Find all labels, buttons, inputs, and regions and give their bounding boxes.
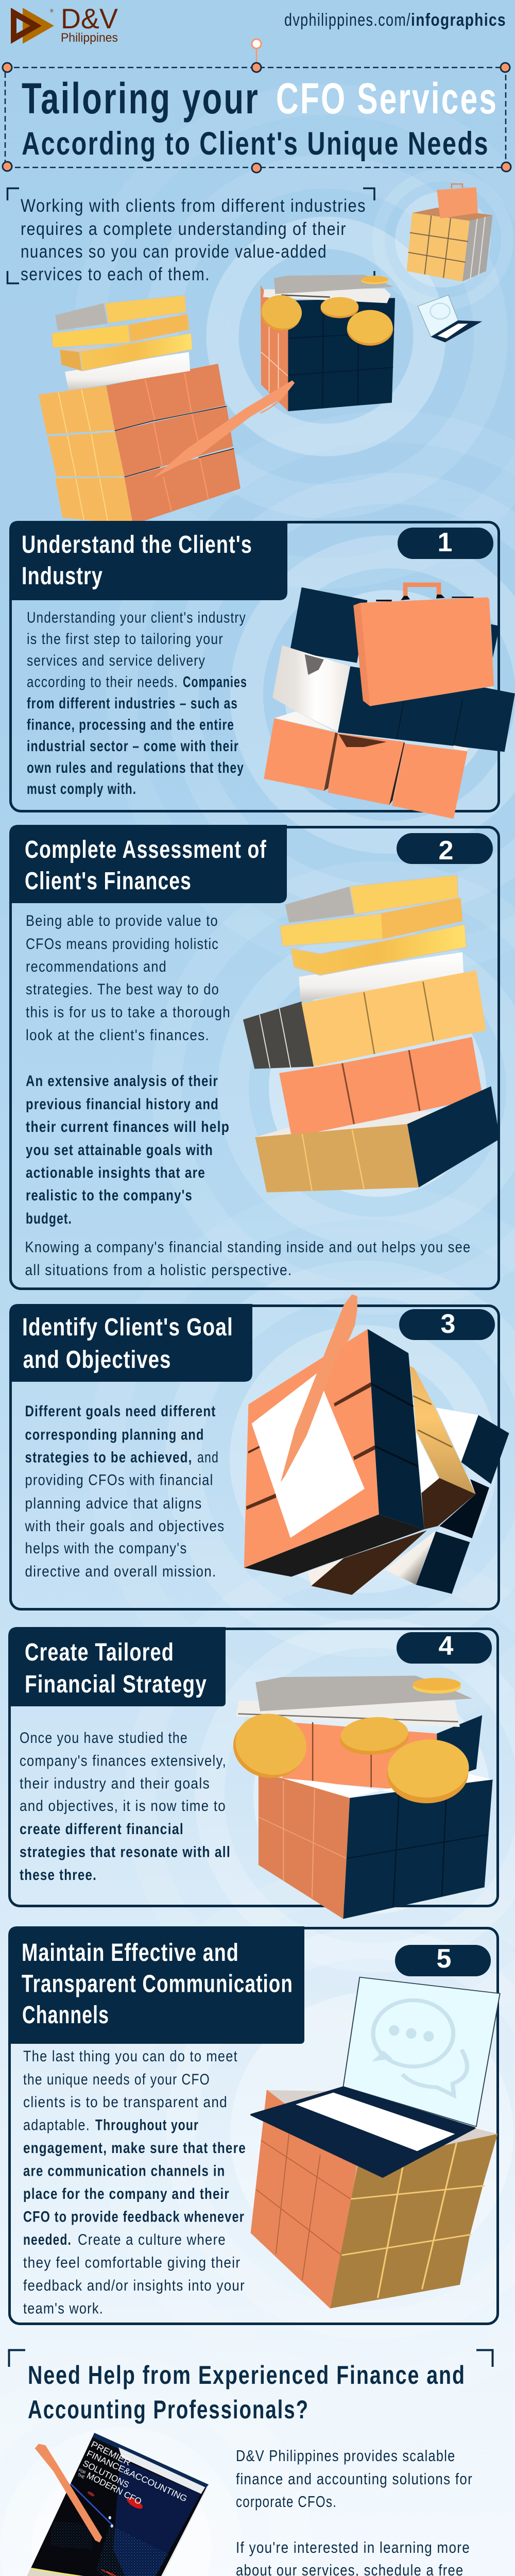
panel 5 heading: Maintain Effective and [22, 1939, 239, 1967]
step number 4: 4 [439, 1631, 454, 1661]
panel 1 body text: must comply with. [27, 781, 136, 798]
panel 1 body text: services and service delivery [27, 652, 205, 669]
panel 2 body text [25, 912, 471, 1279]
call to action body text: finance and accounting solutions for [236, 2470, 473, 2488]
panel 2 body text: An extensive analysis of their [26, 1073, 218, 1090]
panel 3 body text: planning advice that aligns [25, 1495, 202, 1512]
panel 4 body text: strategies that resonate with all [20, 1844, 231, 1861]
panel 5 body text: engagement, make sure that there [23, 2140, 246, 2157]
panel 1 heading: Industry [22, 563, 103, 590]
intro text with brackets: services to each of them. [21, 264, 210, 284]
panel 3 body text: strategies to be achieved, [25, 1449, 193, 1466]
panel 4 body text: company's finances extensively, [20, 1753, 227, 1770]
panel 1 body text: from different industries – such as [27, 695, 238, 712]
logo: Philippines [61, 31, 118, 45]
panel 2 body text: this is for us to take a thorough [26, 1004, 231, 1021]
intro text with brackets [7, 189, 374, 284]
panel 5 heading: Channels [22, 2002, 109, 2029]
panel 2 heading: Complete Assessment of [25, 836, 267, 863]
panel 2 body text: realistic to the company's [26, 1187, 193, 1204]
step number 2 [397, 833, 493, 866]
call to action body text: corporate CFOs. [236, 2493, 337, 2511]
call to action heading: Accounting Professionals? [28, 2395, 309, 2424]
panel 5 body text: place for the company and their [23, 2185, 230, 2202]
panel 3 body text: and [197, 1449, 219, 1466]
call to action body text: If you're interested in learning more [236, 2538, 470, 2556]
panel 2 body text: their current finances will help [26, 1118, 230, 1136]
panel 5 body text: clients is to be transparent and [23, 2094, 228, 2111]
illustration: lower cube rows [255, 1037, 500, 1192]
illustration: whitepaper on cube with pen [17, 2433, 209, 2576]
panel 4 body text [20, 1730, 231, 1884]
panel 1: understand the client's industry [9, 521, 515, 819]
panel 2 body text: actionable insights that are [26, 1164, 205, 1181]
panel 3 body text: with their goals and objectives [25, 1518, 225, 1535]
illustration: pen [153, 380, 295, 478]
panel 5 body text: CFO to provide feedback whenever [23, 2208, 245, 2226]
panel 5 body text: are communication channels in [23, 2163, 226, 2179]
panel 5 body text: The last thing you can do to meet [23, 2048, 238, 2065]
illustration: whitepaper on cube with pen: FOR [78, 2468, 87, 2475]
panel 2 heading [9, 825, 287, 903]
panel 1 body text: own rules and regulations that they [27, 759, 244, 776]
panel 2 body text: CFOs means providing holistic [26, 936, 219, 953]
panel 1 body text: finance, processing and the entire [27, 716, 234, 734]
panel 4 heading: Create Tailored [25, 1639, 174, 1666]
panel 4 heading: Financial Strategy [25, 1671, 207, 1698]
illustration: dark cube with sheets and coins [257, 275, 395, 411]
logo [11, 3, 118, 45]
panel 5 body text: the unique needs of your CFO [23, 2071, 210, 2088]
panel 4: create tailored financial strategy [8, 1627, 497, 1919]
panel 5 body text: Throughout your [95, 2117, 199, 2134]
panel 1 body text: according to their needs. [27, 674, 178, 690]
step number 1: 1 [438, 528, 452, 557]
panel 4 body text: and objectives, it is now time to [20, 1798, 226, 1815]
panel 5 body text: Create a culture where [78, 2231, 226, 2248]
site url: dvphilippines.com/ [284, 10, 411, 30]
illustration: small laptop [418, 295, 482, 343]
panel 1 heading [9, 521, 287, 600]
step number 3 [399, 1309, 495, 1340]
logo: ® [50, 8, 54, 13]
panel 5 heading: Transparent Communication [22, 1970, 293, 1998]
panel 5: maintain effective and transparent communication channels [8, 1926, 500, 2324]
logo: D&V [61, 3, 118, 35]
panel 3 heading [9, 1304, 252, 1382]
step number 5 [395, 1944, 491, 1976]
panel 1 body text: Companies [183, 674, 247, 690]
call to action body text [236, 2447, 480, 2576]
panel 1 body text: is the first step to tailoring your [27, 631, 224, 648]
panel 5 body text [23, 2048, 246, 2317]
step number 2: 2 [439, 836, 453, 866]
title selection frame [3, 39, 511, 173]
panel 4 body text: create different financial [20, 1821, 184, 1838]
panel 5 heading [8, 1926, 304, 2044]
panel 1 body text [27, 609, 247, 798]
step number 4 [397, 1631, 492, 1664]
panel 4 body text: Once you have studied the [20, 1730, 188, 1747]
intro text with brackets: Working with clients from different industries [21, 196, 366, 216]
panel 3: identify client's goal and objectives [9, 1294, 509, 1609]
panel 4 heading [8, 1627, 226, 1706]
illustration: books on multicolour cube [243, 875, 486, 1069]
panel 2 body text: recommendations and [26, 958, 167, 975]
panel 4 body text: their industry and their goals [20, 1775, 210, 1792]
panel 5 body text: feedback and/or insights into your [23, 2277, 245, 2294]
illustration: whitepaper on cube with pen: MODERN CFO [85, 2470, 143, 2506]
illustration: orange and yellow cube with books [39, 295, 241, 524]
panel 3 heading: Identify Client's Goal [22, 1314, 233, 1341]
panel 2 body text: budget. [26, 1210, 72, 1227]
panel 2 body text: all situations from a holistic perspective. [25, 1262, 293, 1279]
panel 2 heading: Client's Finances [25, 868, 192, 895]
panel 2 body text: previous financial history and [26, 1096, 219, 1113]
step number 5: 5 [437, 1944, 451, 1974]
intro text with brackets: requires a complete understanding of their [21, 219, 347, 239]
call to action heading [28, 2361, 466, 2424]
illustration: whitepaper on cube with pen: SOLUTIONS [81, 2459, 131, 2490]
panel 1 heading: Understand the Client's [22, 531, 252, 558]
panel 1 body text: Understanding your client's industry [27, 609, 246, 626]
panel 3 body text: helps with the company's [25, 1540, 187, 1557]
intro text with brackets: nuances so you can provide value-added [21, 242, 327, 262]
call to action brackets [9, 2350, 495, 2576]
panel 1 body text: industrial sector – come with their [27, 738, 239, 755]
panel 2 body text: look at the client's finances. [26, 1027, 210, 1044]
panel 3 body text: Different goals need different [25, 1403, 216, 1420]
main title [22, 74, 498, 162]
illustration: whitepaper on cube with pen: PREMIER [90, 2439, 132, 2468]
panel 2: complete assessment of client's finances [9, 825, 500, 1289]
illustration: small cube with briefcase [407, 184, 493, 282]
panel 3 heading: and Objectives [23, 1346, 171, 1374]
panel 2 body text: you set attainable goals with [26, 1142, 213, 1159]
panel 5 body text: adaptable. [23, 2117, 90, 2134]
panel 2 body text: strategies. The best way to do [26, 981, 219, 998]
panel 3 body text [25, 1403, 225, 1580]
illustration: whitepaper on cube with pen: FINANCE&ACCOUNTING [85, 2448, 188, 2504]
main title: Tailoring your [22, 74, 260, 123]
panel 4 body text: these three. [20, 1867, 97, 1884]
panel 5 body text: team's work. [23, 2300, 104, 2317]
panel 5 body text: they feel comfortable giving their [23, 2255, 241, 2271]
illustration: cube with note and pen [244, 1294, 509, 1595]
panel 3 body text: providing CFOs with financial [25, 1472, 213, 1489]
illustration: cube with briefcase [264, 585, 515, 819]
panel 3 body text: corresponding planning and [25, 1427, 204, 1444]
illustration: cube with sheets and coins [222, 1676, 493, 1919]
step number 3: 3 [441, 1309, 455, 1339]
step number 1 [398, 528, 493, 559]
panel 3 body text: directive and overall mission. [25, 1563, 216, 1580]
panel 2 body text: Being able to provide value to [26, 912, 218, 929]
illustration: whitepaper on cube with pen: THE [77, 2472, 85, 2480]
call to action body text: D&V Philippines provides scalable [236, 2447, 455, 2465]
illustration: cube with laptop [251, 1977, 500, 2309]
panel 5 body text: needed. [23, 2231, 72, 2248]
